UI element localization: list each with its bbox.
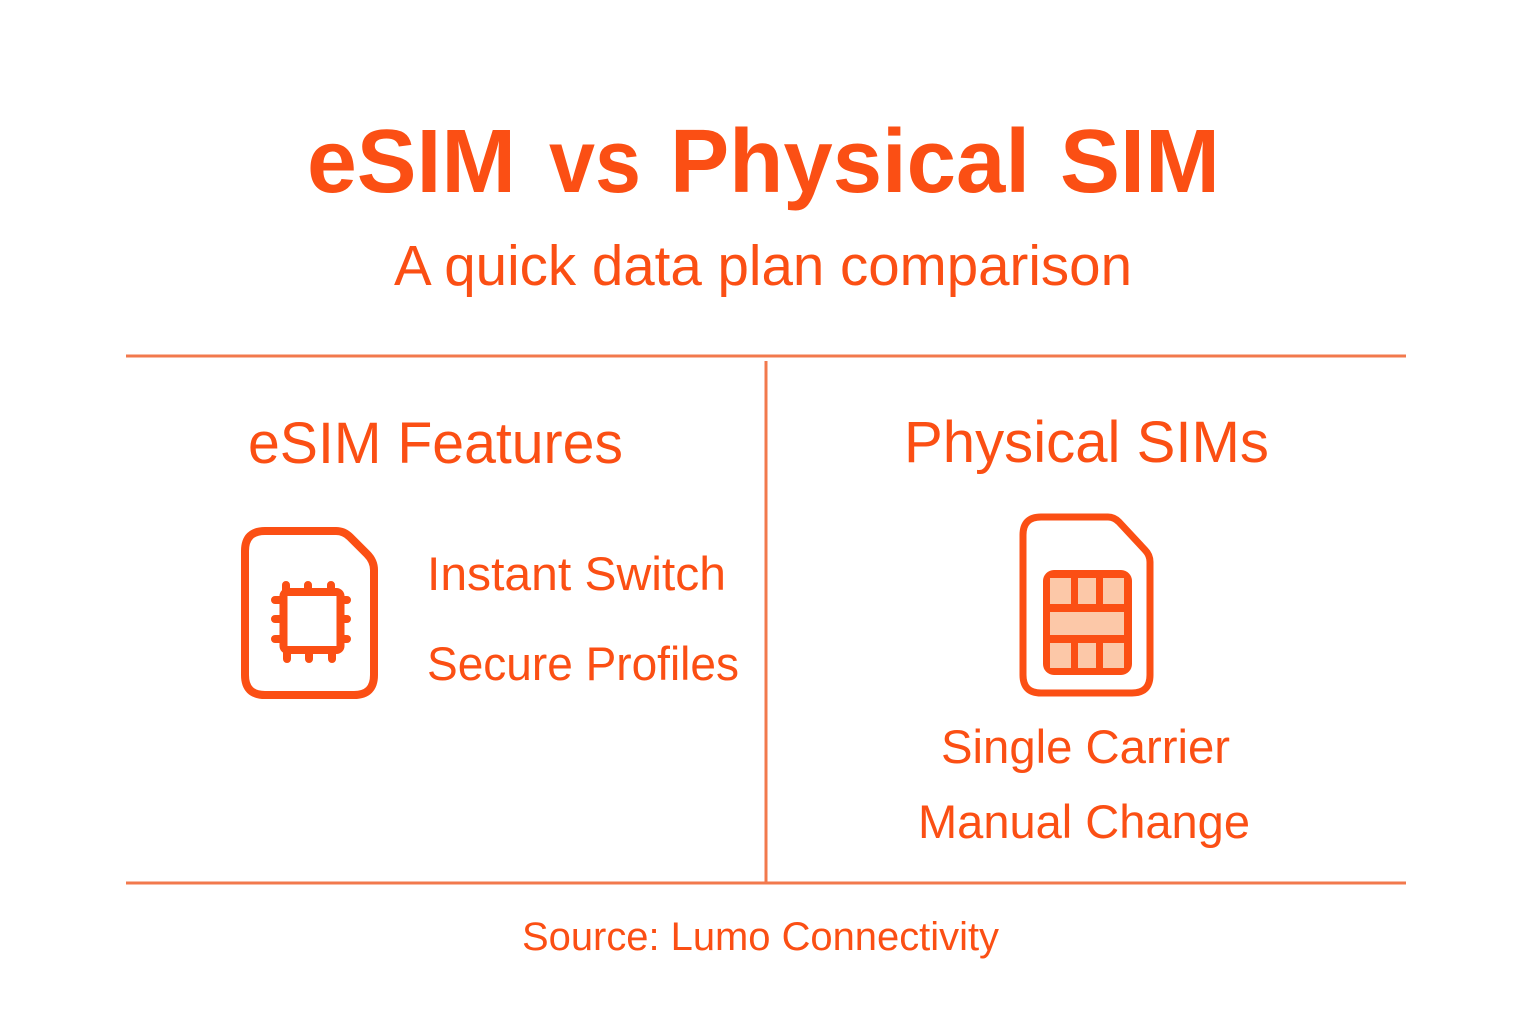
icon: eSIM card with chip — [245, 531, 374, 695]
title: eSIM — [307, 112, 516, 212]
subtitle: A quick data plan comparison — [394, 234, 1132, 298]
panel: eSIM features — [245, 411, 739, 695]
icon: physical SIM card with contacts — [1023, 517, 1150, 693]
feature: Single Carrier: Single Carrier — [941, 720, 1230, 773]
feature: Instant Switch: Instant Switch — [427, 547, 726, 600]
title: vs — [549, 112, 641, 212]
source: Source: Lumo Connectivity — [522, 915, 999, 959]
heading: eSIM Features: eSIM Features — [248, 411, 623, 476]
feature: Manual Change: Manual Change — [918, 795, 1250, 848]
title: SIM — [1060, 112, 1220, 212]
heading: Physical SIMs: Physical SIMs — [904, 410, 1269, 475]
panel: physical SIMs — [904, 410, 1269, 848]
title: Physical — [670, 112, 1030, 212]
feature: Secure Profiles: Secure Profiles — [427, 637, 739, 690]
